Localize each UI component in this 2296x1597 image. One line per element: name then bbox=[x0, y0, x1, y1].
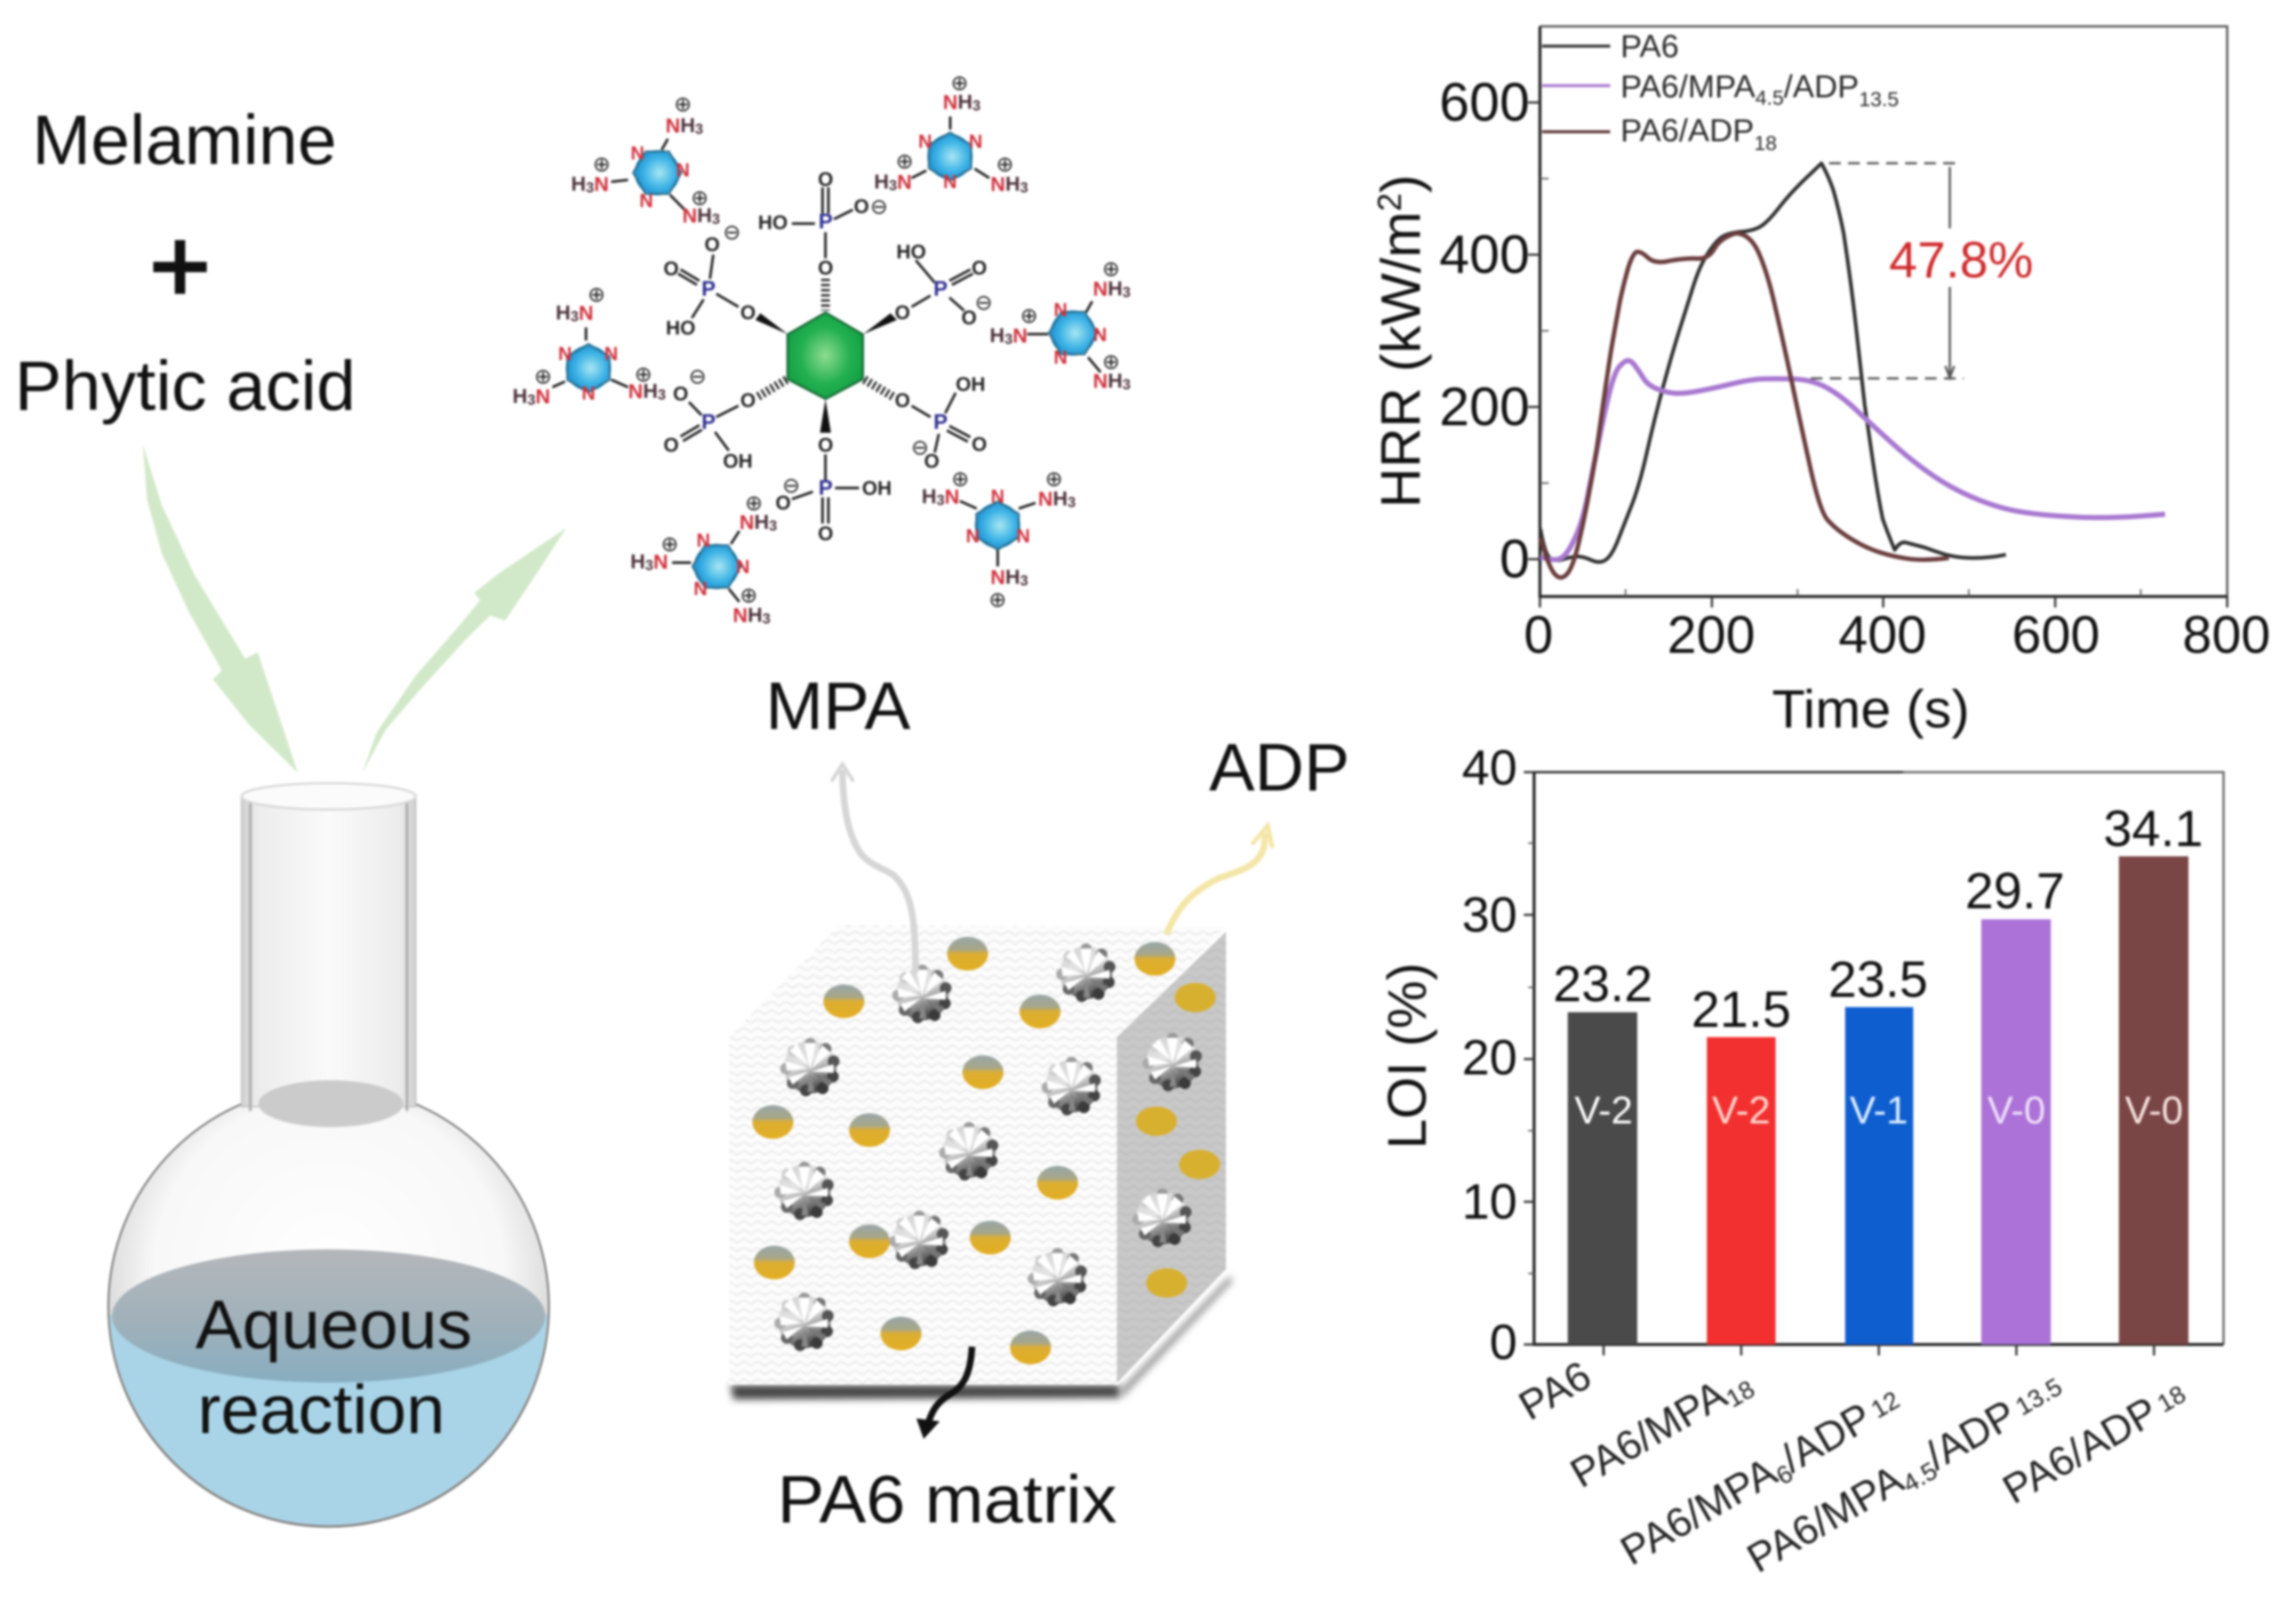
x axis category labels: 18 bbox=[1721, 1375, 1760, 1413]
bar value labels: 21.5 bbox=[1691, 981, 1791, 1038]
chart frame and ticks bbox=[1524, 772, 2224, 1355]
melamine cation: upper right: 3 bbox=[973, 98, 981, 114]
x axis category labels: 6 bbox=[1772, 1459, 1798, 1491]
phosphate group: lower right: OH bbox=[956, 373, 985, 395]
melamine cation: right: NH bbox=[1093, 369, 1123, 392]
x axis tick labels: 0 bbox=[1524, 606, 1553, 665]
melamine cation: lower left: 3 bbox=[769, 518, 777, 534]
melamine cation: upper left: ⊕ bbox=[593, 152, 610, 176]
curve: PA6/MPA4.5/ADP13.5 bbox=[1540, 361, 2165, 560]
phosphate group: top: O bbox=[818, 168, 834, 190]
legend: 18 bbox=[1754, 132, 1777, 154]
x axis category labels: PA6 bbox=[1511, 1352, 1598, 1429]
bar: PA6/MPA4.5/ADP13.5 bbox=[1981, 919, 2051, 1344]
melamine cation: upper left: 3 bbox=[586, 180, 594, 196]
phosphate group: lower right: P bbox=[933, 411, 948, 434]
x axis tick labels: 800 bbox=[2183, 606, 2270, 665]
x axis category labels: 18 bbox=[2153, 1380, 2191, 1418]
arrow: PA6 matrix pointer bbox=[916, 1347, 972, 1439]
x axis category labels: /ADP bbox=[1773, 1394, 1879, 1481]
x axis tick labels: 400 bbox=[1839, 606, 1926, 665]
melamine cation: lower left: 3 bbox=[645, 558, 654, 574]
melamine cation: lower right: ⊕ bbox=[951, 466, 969, 491]
line chart: HRR versus time bbox=[1370, 26, 2270, 739]
x axis category labels: PA6/MPA bbox=[1612, 1448, 1784, 1574]
melamine cation: lower left bbox=[630, 490, 777, 627]
phosphate group: lower right: ⊖ bbox=[911, 435, 929, 460]
phosphate group: upper left bbox=[663, 220, 756, 339]
melamine cation: lower right: 3 bbox=[1020, 573, 1028, 589]
melamine cation: upper right: N bbox=[897, 170, 912, 193]
arrow: reagents into flask bbox=[143, 444, 298, 773]
flask label bbox=[195, 1286, 472, 1448]
phosphate group: upper right: O bbox=[961, 307, 977, 329]
phosphate group: top: P bbox=[818, 210, 833, 233]
UL-94 rating labels: V-1 bbox=[1850, 1089, 1908, 1132]
melamine cation: upper right: ⊕ bbox=[951, 70, 968, 95]
peak difference annotation bbox=[1811, 163, 1964, 378]
melamine cation: left: 3 bbox=[570, 309, 579, 325]
phosphate group: upper left: O bbox=[704, 233, 720, 255]
liquid surface bbox=[112, 1249, 545, 1383]
melamine cation: lower right: ⊕ bbox=[1045, 466, 1063, 491]
x axis tick labels bbox=[1524, 606, 2270, 665]
legend: 4.5 bbox=[1755, 86, 1784, 109]
melamine cation: lower right bbox=[921, 466, 1076, 612]
melamine cation: upper left: N bbox=[631, 142, 644, 164]
x axis category labels: PA6/MPA bbox=[1739, 1456, 1911, 1582]
melamine cation: lower right: NH bbox=[990, 565, 1020, 588]
melamine cation: lower left: N bbox=[697, 529, 710, 551]
phosphate group: lower left bbox=[663, 364, 756, 472]
melamine cation: upper right: NH bbox=[990, 173, 1020, 195]
phosphate group: lower right: O bbox=[971, 433, 987, 455]
phosphate group: lower left: P bbox=[701, 411, 716, 434]
phosphate group: bottom: O bbox=[818, 434, 834, 456]
curve: PA6/ADP18 bbox=[1540, 233, 1949, 577]
legend bbox=[1542, 29, 1899, 154]
y axis tick labels bbox=[1462, 740, 1517, 1370]
melamine cation: lower left: ⊕ bbox=[740, 583, 758, 607]
melamine cation: lower right: 3 bbox=[1068, 495, 1076, 511]
neck bottom opening bbox=[258, 1080, 403, 1127]
phosphate group: bottom: OH bbox=[862, 477, 891, 499]
x axis category labels: 4.5 bbox=[1899, 1456, 1942, 1498]
cube highlight edge bbox=[1117, 1271, 1226, 1385]
UL-94 rating labels: V-0 bbox=[1987, 1089, 2046, 1132]
melamine cation: lower right: NH bbox=[1038, 487, 1068, 509]
melamine cation: lower left: NH bbox=[739, 511, 769, 533]
phosphate group: upper right: O bbox=[971, 257, 987, 279]
melamine cation: right: 3 bbox=[1123, 377, 1131, 393]
melamine cation: lower right: H bbox=[921, 485, 936, 508]
melamine cation: upper left: NH bbox=[682, 203, 712, 227]
phosphate group: top: ⊖ bbox=[870, 194, 888, 219]
phosphate group: upper right bbox=[894, 241, 992, 329]
phosphate group: upper right: HO bbox=[897, 241, 926, 263]
melamine cation: right: NH bbox=[1093, 277, 1123, 300]
cube bottom shadow bbox=[730, 1385, 1120, 1399]
legend: PA6/ADP bbox=[1620, 113, 1754, 149]
melamine cation: left: 3 bbox=[658, 387, 666, 403]
neck rim bbox=[242, 783, 416, 809]
legend: /ADP bbox=[1784, 69, 1859, 105]
melamine cation: lower left: N bbox=[654, 550, 668, 572]
phosphate group: lower left: ⊖ bbox=[689, 364, 706, 389]
ADP particles bbox=[752, 937, 1220, 1364]
phosphate group: top: O bbox=[853, 195, 870, 217]
y axis title: 2 bbox=[1371, 193, 1408, 212]
phosphate group: upper right: O bbox=[894, 302, 910, 323]
bar value labels: 29.7 bbox=[1965, 862, 2065, 919]
UL-94 rating labels: V-2 bbox=[1712, 1089, 1770, 1132]
phosphate group: upper left: HO bbox=[666, 317, 695, 339]
phosphate group: top bbox=[758, 168, 888, 279]
y axis title: HRR (kW/m bbox=[1370, 212, 1432, 508]
melamine cation: left bbox=[512, 282, 666, 408]
UL-94 rating labels: V-0 bbox=[2125, 1089, 2183, 1132]
flask illustration bbox=[108, 783, 549, 1534]
melamine cation: upper right: N bbox=[943, 171, 957, 192]
melamine cation: left: ⊕ bbox=[635, 362, 652, 386]
y axis tick labels: 0 bbox=[1500, 528, 1530, 589]
phosphate group: lower right: O bbox=[894, 389, 910, 411]
UL-94 rating labels bbox=[1574, 1089, 2183, 1132]
phosphate group: bottom: O bbox=[775, 492, 791, 514]
melamine cation: upper left: N bbox=[594, 173, 609, 195]
phosphate group: bottom: ⊖ bbox=[782, 473, 800, 498]
x axis title: Time (s) bbox=[1772, 680, 1970, 739]
melamine cation: left: H bbox=[512, 385, 527, 407]
phosphate group: upper left: O bbox=[740, 302, 756, 323]
x axis category labels: /ADP bbox=[1918, 1391, 2024, 1478]
central inositol ring bbox=[788, 313, 863, 399]
phosphate group: bottom bbox=[775, 434, 891, 545]
arrow: flask to MPA molecule bbox=[362, 528, 566, 773]
bar chart: LOI and UL-94 rating bbox=[1377, 740, 2224, 1584]
melamine cation: lower right: ⊕ bbox=[989, 587, 1006, 612]
melamine cation: upper left bbox=[571, 91, 720, 228]
y axis title: LOI (%) bbox=[1377, 962, 1437, 1149]
legend: PA6/MPA bbox=[1620, 69, 1755, 105]
melamine cation: left: N bbox=[558, 343, 572, 364]
phosphate group: top: O bbox=[818, 257, 834, 279]
melamine cation: upper right: ⊕ bbox=[896, 149, 913, 173]
bar value labels: 23.5 bbox=[1828, 951, 1928, 1008]
phosphate group: lower right: O bbox=[924, 450, 940, 472]
melamine cation: upper right: N bbox=[919, 130, 932, 152]
melamine cation: lower left: ⊕ bbox=[661, 531, 678, 556]
bar value labels: 23.2 bbox=[1553, 955, 1653, 1012]
cube front face bbox=[729, 1037, 1117, 1385]
arrow: MPA release bbox=[832, 764, 916, 970]
melamine cation: lower right: 3 bbox=[936, 493, 945, 509]
reagent label: Phytic acid: Phytic acid bbox=[15, 347, 356, 425]
phosphate group: lower right bbox=[894, 373, 987, 472]
x axis tick labels: 200 bbox=[1667, 606, 1755, 665]
melamine cation: left: NH bbox=[628, 379, 658, 403]
y axis tick labels: 600 bbox=[1440, 72, 1530, 132]
melamine cation: upper right: ⊕ bbox=[996, 152, 1014, 176]
melamine cation: left: 3 bbox=[527, 392, 536, 408]
melamine cation: left: ⊕ bbox=[588, 282, 605, 307]
phosphate group: upper left: O bbox=[663, 258, 679, 280]
x axis category labels: 13.5 bbox=[2011, 1373, 2067, 1421]
melamine cation: right: N bbox=[1013, 323, 1028, 347]
melamine cation: lower left: ⊕ bbox=[745, 490, 763, 515]
melamine cation: lower right: N bbox=[1017, 525, 1030, 547]
melamine cation: lower left: N bbox=[694, 577, 707, 599]
curve: PA6 bbox=[1540, 163, 2006, 562]
melamine cation: lower right: N bbox=[945, 485, 960, 508]
bar: PA6/ADP18 bbox=[2119, 856, 2188, 1344]
melamine cation: lower right: N bbox=[966, 525, 979, 547]
flask body bbox=[108, 1086, 549, 1527]
melamine cation: left: H bbox=[556, 302, 570, 323]
annotation value: 47.8% bbox=[1889, 231, 2033, 288]
molecule: melamine phytate bbox=[512, 70, 1131, 627]
melamine cation: right: H bbox=[990, 323, 1004, 347]
melamine cation: right: N bbox=[1054, 346, 1067, 368]
melamine cation: lower left: N bbox=[736, 556, 749, 577]
flask label: reaction bbox=[198, 1371, 445, 1448]
bonds of phytate core and melamine substituents bbox=[553, 116, 1101, 602]
cube right face bbox=[1117, 932, 1226, 1385]
melamine cation: upper left: H bbox=[571, 173, 586, 195]
y axis title: ) bbox=[1370, 174, 1432, 193]
melamine cation: upper left: N bbox=[640, 190, 653, 212]
x axis category labels bbox=[1511, 1352, 2194, 1584]
y axis tick labels bbox=[1440, 72, 1530, 589]
melamine cation: upper left: 3 bbox=[695, 121, 703, 138]
y axis tick labels: 20 bbox=[1462, 1030, 1517, 1085]
phosphate group: upper right: ⊖ bbox=[975, 290, 992, 315]
melamine cation: right: ⊕ bbox=[1102, 349, 1120, 374]
phosphate group: top: HO bbox=[758, 212, 788, 233]
melamine cation: lower right: N bbox=[991, 485, 1004, 507]
cube top face bbox=[729, 925, 1226, 1037]
MPA particles bbox=[774, 943, 1202, 1351]
melamine cation: left: N bbox=[582, 382, 595, 404]
y axis tick labels: 400 bbox=[1440, 224, 1530, 285]
UL-94 rating labels: V-2 bbox=[1574, 1089, 1633, 1132]
y axis tick labels: 30 bbox=[1462, 887, 1517, 943]
bar: PA6/MPA6/ADP12 bbox=[1845, 1007, 1913, 1344]
phosphate group: lower left: O bbox=[673, 383, 689, 405]
melamine cation: right: 3 bbox=[1004, 332, 1013, 348]
melamine cation: left: N bbox=[536, 385, 550, 407]
melamine cation: right: ⊕ bbox=[1020, 303, 1038, 328]
phosphate group: lower left: O bbox=[663, 434, 679, 456]
melamine cation: lower left: H bbox=[630, 550, 645, 572]
melamine cation: right: N bbox=[1093, 323, 1107, 345]
label: ADP: ADP bbox=[1209, 730, 1350, 805]
melamine cation: left: N bbox=[579, 302, 594, 323]
flask neck bbox=[242, 795, 416, 1107]
legend: 13.5 bbox=[1859, 88, 1899, 111]
legend: PA6 bbox=[1620, 29, 1679, 64]
bar value labels bbox=[1553, 800, 2203, 1038]
x axis category labels: PA6/MPA bbox=[1563, 1371, 1734, 1497]
melamine cation: upper right bbox=[874, 70, 1028, 196]
melamine cation: upper left: 3 bbox=[712, 212, 720, 228]
bar value labels: 34.1 bbox=[2104, 800, 2203, 857]
phosphate group: bottom: P bbox=[818, 476, 833, 500]
melamine cation: lower left: NH bbox=[733, 603, 763, 627]
bar: PA6/MPA18 bbox=[1707, 1037, 1776, 1344]
melamine cation: upper right: N bbox=[969, 130, 982, 152]
reagent label: Melamine: Melamine bbox=[32, 101, 337, 179]
melamine cation: upper right: 3 bbox=[889, 178, 897, 194]
y axis tick labels: 200 bbox=[1440, 376, 1530, 437]
melamine cation: left: N bbox=[605, 343, 618, 364]
melamine cation: upper left: ⊕ bbox=[674, 91, 692, 116]
PA6 cube composite bbox=[729, 764, 1272, 1439]
x axis tick labels: 600 bbox=[2012, 606, 2100, 665]
phosphate group: lower left: OH bbox=[723, 450, 752, 472]
melamine cation: right bbox=[990, 256, 1131, 393]
phosphate group: upper right: P bbox=[933, 277, 948, 301]
label: MPA: MPA bbox=[766, 669, 911, 744]
y axis tick labels: 10 bbox=[1462, 1174, 1517, 1230]
melamine cation: lower left: 3 bbox=[763, 611, 771, 627]
cube side shadow bbox=[1120, 1276, 1233, 1396]
melamine cation: right: N bbox=[1054, 299, 1067, 321]
flask label: Aqueous bbox=[195, 1286, 472, 1363]
phosphate group: bottom: O bbox=[818, 523, 834, 545]
label: PA6 matrix: PA6 matrix bbox=[777, 1462, 1117, 1537]
phosphate group: lower left: O bbox=[740, 389, 756, 411]
melamine cation: right: ⊕ bbox=[1102, 256, 1120, 281]
y axis tick labels: 0 bbox=[1489, 1314, 1517, 1370]
y axis tick labels: 40 bbox=[1462, 740, 1517, 796]
x axis category labels: PA6/ADP bbox=[1995, 1388, 2165, 1513]
x axis category labels: 12 bbox=[1866, 1386, 1904, 1424]
melamine cation: upper right: NH bbox=[943, 91, 973, 113]
arrow: ADP release bbox=[1167, 826, 1272, 932]
melamine cation: upper left: NH bbox=[665, 114, 695, 136]
flask liquid bbox=[108, 1314, 549, 1534]
melamine cation: right: 3 bbox=[1123, 285, 1131, 301]
bar: PA6 bbox=[1568, 1012, 1637, 1344]
phosphate group: upper left: P bbox=[701, 277, 716, 301]
phosphate group: upper left: ⊖ bbox=[723, 220, 741, 244]
melamine cation: upper right: 3 bbox=[1020, 180, 1028, 196]
melamine cation: left: ⊕ bbox=[534, 364, 552, 389]
melamine cation: upper left: N bbox=[676, 159, 689, 181]
plus sign: + bbox=[150, 208, 210, 324]
melamine cation: upper right: H bbox=[874, 170, 889, 193]
chart frame and ticks bbox=[1528, 26, 2227, 607]
melamine cation: upper left: ⊕ bbox=[691, 185, 708, 210]
